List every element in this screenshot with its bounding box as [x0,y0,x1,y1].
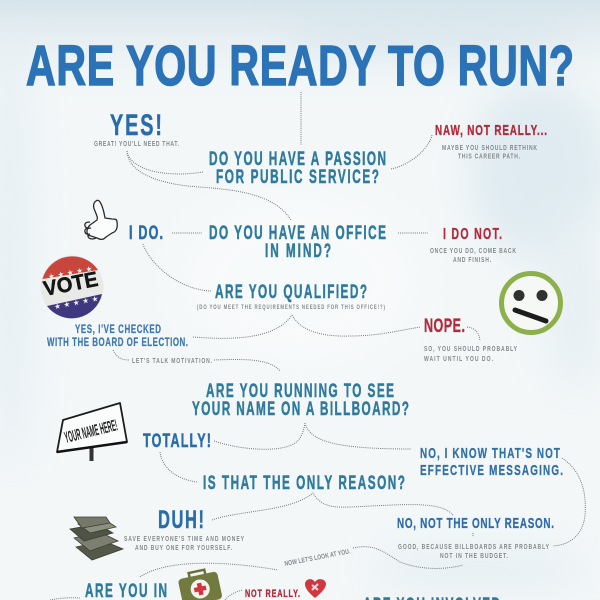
answer: nope: SO, YOU SHOULD PROBABLY [424,345,517,353]
note: motivation: LET'S TALK MOTIVATION. [132,357,212,365]
icon: thumbs up [85,200,117,239]
answer: yes: YES! [110,109,162,142]
answer: not really: NOT REALLY. [245,588,300,599]
answer: i do: I DO. [129,222,163,244]
icon: billboard [57,403,127,461]
answer: i do not: AND FINISH. [453,256,491,264]
answer: not the only reason: GOOD, BECAUSE BILLBOARDS ARE PROBABLY [398,543,549,551]
question: billboard [192,381,409,420]
question: office: IN MIND? [265,241,331,262]
question: qualified: (DO YOU MEET THE REQUIREMENTS NEEDED FOR THIS OFFICE!?) [197,304,385,311]
answer: effective messaging: NO, I KNOW THAT'S NOT [420,445,560,462]
answer: duh [124,507,244,552]
answer: yes, checked [47,324,188,350]
answer: naw: THIS CAREER PATH. [458,153,520,161]
icon: first aid kit [177,567,223,600]
question: billboard: YOUR NAME ON A BILLBOARD? [192,399,409,420]
note: now let's look at you: NOW LET'S LOOK AT YOU. [284,548,351,568]
answer: totally: TOTALLY! [143,430,211,452]
question: qualified [197,282,385,311]
question: passion: DO YOU HAVE A PASSION [209,149,386,170]
answer: effective messaging: EFFECTIVE MESSAGING. [420,462,563,479]
text: YOUR NAME HERE! [63,417,119,447]
title: ARE YOU READY TO RUN? [26,33,574,98]
icon: neutral face [502,274,560,332]
icon: vote button: VOTE [42,268,100,301]
answer: nope: NOPE. [424,315,465,337]
answer: yes [94,109,179,148]
question: office: DO YOU HAVE AN OFFICE [209,223,386,244]
answer: effective messaging [420,445,563,479]
answer: i do not [430,225,516,264]
answer: naw [435,122,547,161]
answer: naw: NAW, NOT REALLY... [435,122,547,139]
icon: money stack [70,517,123,560]
answer: duh: SAVE EVERYONE'S TIME AND MONEY [124,535,244,543]
question: billboard: ARE YOU RUNNING TO SEE [206,381,394,402]
answer: i do not: I DO NOT. [443,225,502,243]
icon: vote button: ★★★★★ [54,294,100,311]
answer: i do not: ONCE YOU DO, COME BACK [430,247,516,255]
answer: not the only reason: NOT IN THE BUDGET. [440,552,508,560]
answer: nope [424,315,517,363]
question: office [209,223,386,262]
answer: duh: DUH! [158,507,204,534]
icon: vote button [40,256,104,318]
answer: yes, checked: WITH THE BOARD OF ELECTION. [47,337,188,350]
flow connectors [50,92,585,600]
question: only reason: IS THAT THE ONLY REASON? [203,473,405,494]
question: qualified: ARE YOU QUALIFIED? [215,282,367,303]
answer: naw: MAYBE YOU SHOULD RETHINK [442,144,538,152]
icon: vote button: ★★★★★ [48,264,94,281]
question: passion [209,149,386,188]
answer: not the only reason: NO, NOT THE ONLY REASON. [397,515,554,532]
answer: not the only reason [397,515,554,560]
answer: duh: AND BUY ONE FOR YOURSELF. [135,544,232,552]
answer: yes: GREAT! YOU'LL NEED THAT. [94,140,179,148]
icon: heart [305,579,326,598]
answer: nope: WAIT UNTIL YOU DO. [424,355,493,363]
answer: yes, checked: YES, I'VE CHECKED [75,324,161,337]
question: passion: FOR PUBLIC SERVICE? [216,167,379,188]
